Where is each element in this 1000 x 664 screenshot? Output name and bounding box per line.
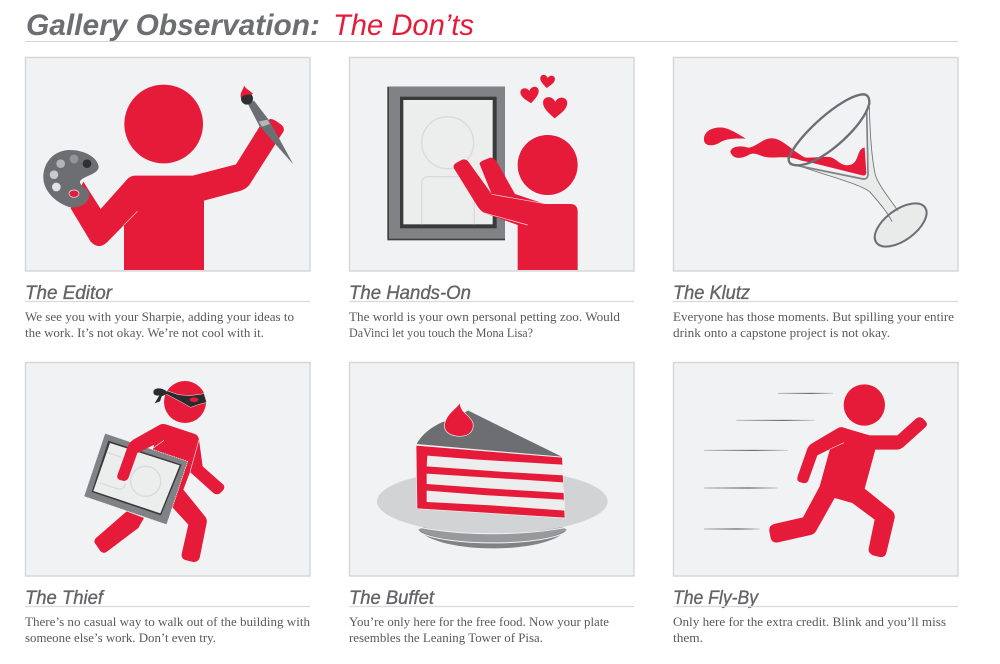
heading: The Buffet: The Buffet xyxy=(349,588,435,609)
icon: running figure with speed lines xyxy=(704,384,927,557)
text: The Klutz description: drink onto a capstone project is not okay. xyxy=(673,326,890,340)
title xyxy=(26,9,474,42)
text: The Thief description xyxy=(25,615,311,645)
panel: The Buffet illustration xyxy=(350,362,634,576)
text: The Hands-On description: DaVinci let you touch the Mona Lisa? xyxy=(349,326,533,340)
heading: The Editor: The Editor xyxy=(25,283,113,304)
card: The Buffet xyxy=(349,362,634,645)
text: The Fly-By description: Only here for the extra credit. Blink and you’ll miss xyxy=(673,615,946,629)
heading: The Klutz: The Klutz xyxy=(673,283,750,304)
icon: tipped martini glass spilling xyxy=(704,94,934,255)
panel: The Thief illustration xyxy=(26,362,310,576)
icon: figure with palette and brush xyxy=(43,85,293,270)
icon: oversized cake slice on plate xyxy=(377,402,608,548)
panel: The Editor illustration xyxy=(26,58,310,271)
heading: The Fly-By: The Fly-By xyxy=(673,588,759,609)
card: The Klutz xyxy=(673,58,958,340)
card: The Editor xyxy=(25,58,310,340)
panel: The Hands-On illustration xyxy=(350,58,634,271)
text: The Hands-On description xyxy=(349,310,621,340)
panel: The Fly-By illustration xyxy=(674,362,958,576)
title: The Don’ts xyxy=(333,9,474,42)
text: The Editor description: We see you with your Sharpie, adding your ideas to xyxy=(25,310,294,324)
text: The Buffet description xyxy=(349,615,609,645)
icon: figure touching framed portrait xyxy=(387,75,578,270)
text: The Thief description: someone else’s work. Don’t even try. xyxy=(25,631,216,645)
card: The Hands-On xyxy=(349,58,634,340)
text: The Klutz description xyxy=(673,310,954,340)
icon: masked figure carrying a painting xyxy=(84,381,224,562)
text: The Thief description: There’s no casual way to walk out of the building with xyxy=(25,615,311,629)
text: The Fly-By description xyxy=(673,615,946,645)
text: The Klutz description: Everyone has those moments. But spilling your entire xyxy=(673,310,954,324)
text: The Editor description: the work. It’s not okay. We’re not cool with it. xyxy=(25,326,264,340)
card: The Thief xyxy=(25,362,311,645)
heading: The Thief: The Thief xyxy=(25,588,105,609)
text: The Buffet description: resembles the Leaning Tower of Pisa. xyxy=(349,631,543,645)
text: The Fly-By description: them. xyxy=(673,631,703,645)
panel: The Klutz illustration xyxy=(674,58,958,271)
card: The Fly-By xyxy=(673,362,958,645)
heading: The Hands-On: The Hands-On xyxy=(349,283,471,304)
text: The Editor description xyxy=(25,310,294,340)
title: Gallery Observation: xyxy=(26,9,320,42)
text: The Hands-On description: The world is your own personal petting zoo. Would xyxy=(349,310,621,324)
text: The Buffet description: You’re only here for the free food. Now your plate xyxy=(349,615,609,629)
